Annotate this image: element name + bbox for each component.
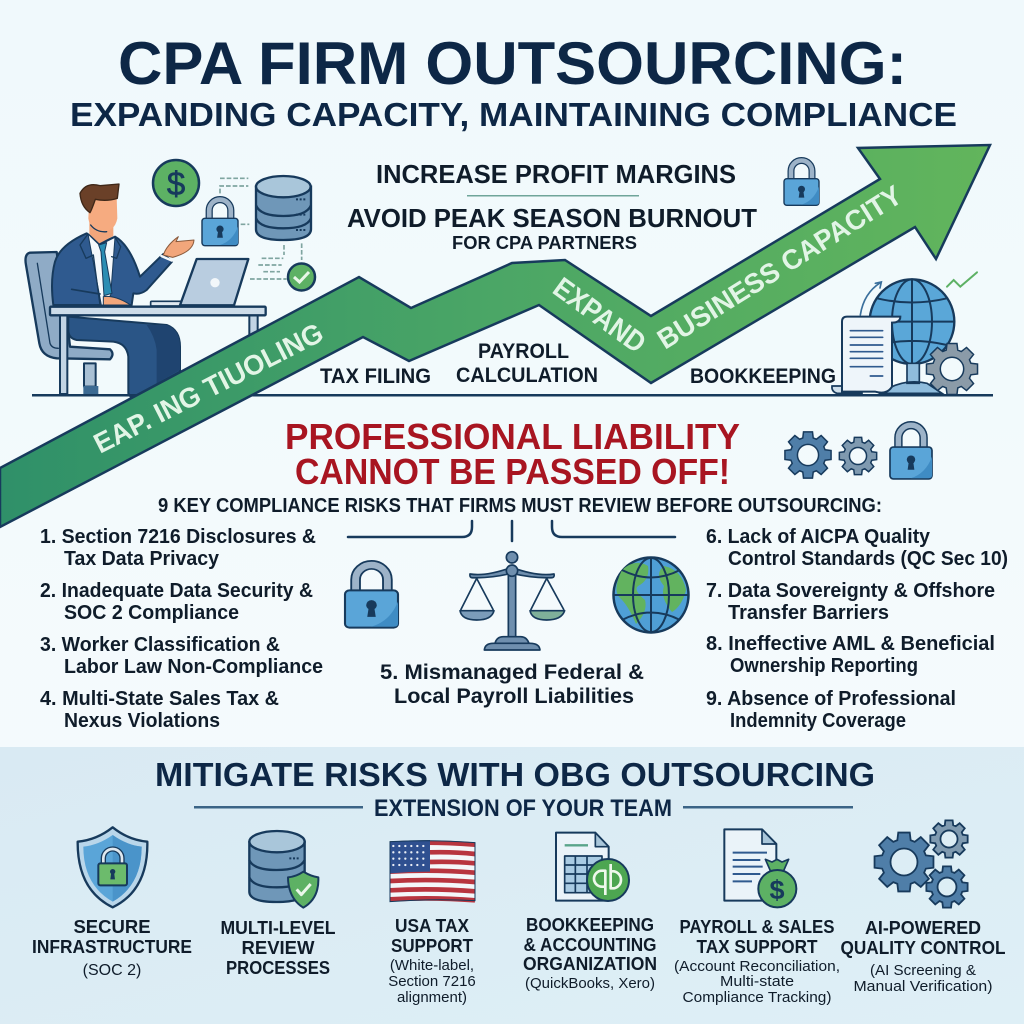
risks list: right column [706, 526, 1008, 732]
risks list: left column: SOC 2 Compliance [64, 602, 239, 624]
label: USA tax support [388, 915, 476, 1006]
icon: security shield [78, 827, 147, 907]
label: multi-level review: PROCESSES [226, 957, 330, 978]
risks list: left column: Tax Data Privacy [64, 548, 220, 570]
label: secure infrastructure: (SOC 2) [83, 962, 141, 979]
service label: payroll calculation: CALCULATION [456, 364, 598, 387]
icon: world globe [614, 558, 688, 632]
risks list: right column: 8. Ineffective AML & Beneficial [706, 633, 995, 655]
label: payroll and sales tax: PAYROLL & SALES [680, 916, 834, 937]
risks list: right column: Ownership Reporting [730, 655, 918, 677]
risks list: right column: 6. Lack of AICPA Quality [706, 526, 931, 548]
label: payroll and sales tax: Multi-state [720, 973, 794, 990]
risks list: left column: 3. Worker Classification & [40, 634, 280, 656]
benefit: avoid peak season burnout: FOR CPA PARTNERS [452, 233, 637, 253]
red heading: professional liability: PROFESSIONAL LIABILITY [285, 416, 740, 457]
risks list: right column: 7. Data Sovereignty & Offshore [706, 580, 995, 602]
red heading: professional liability: CANNOT BE PASSED OFF! [295, 451, 730, 492]
risks list: right column: Transfer Barriers [728, 602, 889, 624]
label: AI-powered quality control: QUALITY CONTROL [840, 937, 1006, 958]
label: USA tax support: (White-label, [390, 957, 474, 974]
icon: dollar coin [153, 160, 199, 206]
label: secure infrastructure [32, 916, 192, 979]
benefit: increase profit margins: INCREASE PROFIT MARGINS [376, 159, 736, 189]
title: CPA FIRM OUTSOURCING: [118, 30, 907, 97]
service label: payroll calculation: PAYROLL [478, 340, 569, 363]
label: bookkeeping and accounting: & ACCOUNTING [524, 934, 656, 955]
bracket connectors [348, 521, 675, 541]
label: AI-powered quality control: AI-POWERED [865, 917, 981, 938]
icon: padlock centre left [345, 565, 398, 628]
icon: blue gears and lock [785, 425, 932, 479]
growth arrow: BUSINESS CAPACITY [652, 179, 908, 355]
label: bookkeeping and accounting: ORGANIZATION [523, 953, 657, 974]
service label: bookkeeping: BOOKKEEPING [690, 365, 836, 388]
label: payroll and sales tax: TAX SUPPORT [696, 936, 818, 957]
icon: grey gear [926, 343, 978, 395]
label: USA tax support: Section 7216 [388, 973, 476, 990]
icon: check badge [288, 264, 315, 290]
label: AI-powered quality control [840, 917, 1006, 995]
icon: USA flag [390, 840, 475, 902]
icon: scales of justice [460, 552, 565, 650]
illustration: accountant at desk [25, 184, 266, 398]
label: USA tax support: SUPPORT [391, 935, 474, 956]
icon: spreadsheet with accounting badge [556, 833, 629, 901]
icon: padlock upper right [784, 160, 819, 205]
label: USA tax support: alignment) [397, 989, 467, 1006]
icon: database server [256, 176, 311, 240]
icon: connector dashes [220, 178, 302, 279]
icon: document with money bag [724, 829, 796, 907]
label: bookkeeping and accounting: BOOKKEEPING [526, 914, 654, 935]
illustration: globe, document and gear [832, 272, 977, 393]
label: payroll and sales tax: Compliance Tracking) [682, 989, 832, 1006]
label: AI-powered quality control: Manual Verification) [854, 978, 993, 995]
label: payroll and sales tax: (Account Reconciliation, [674, 958, 840, 975]
icon: dollar on money bag: $ [769, 875, 785, 905]
risks list: left column: Labor Law Non-Compliance [64, 656, 323, 678]
risk 5 centre: 5. Mismanaged Federal & [380, 660, 644, 684]
risks list: left column: Nexus Violations [64, 710, 220, 732]
service label: tax filing: TAX FILING [320, 365, 431, 388]
panel heading: MITIGATE RISKS WITH OBG OUTSOURCING [155, 756, 875, 793]
risks list: left column: 1. Section 7216 Disclosures & [40, 526, 316, 548]
risk 5 centre [380, 660, 644, 708]
risks list: left column [40, 526, 323, 732]
risks list: right column: Control Standards (QC Sec 10) [728, 548, 1008, 570]
label: multi-level review: MULTI-LEVEL [220, 917, 336, 938]
ground line [32, 394, 993, 396]
benefit: avoid peak season burnout [347, 203, 757, 253]
risks list: right column: Indemnity Coverage [730, 710, 906, 732]
label: secure infrastructure: SECURE [73, 916, 151, 937]
icon: dollar coin: $ [167, 165, 185, 202]
label: multi-level review [220, 917, 336, 978]
risks list: right column: 9. Absence of Professional [706, 688, 956, 710]
growth arrow [0, 145, 990, 527]
label: multi-level review: REVIEW [242, 937, 315, 958]
label: secure infrastructure: INFRASTRUCTURE [32, 936, 192, 957]
risk 5 centre: Local Payroll Liabilities [394, 684, 634, 708]
icon: padlock near database [202, 200, 238, 246]
panel subheading: EXTENSION OF YOUR TEAM [374, 795, 672, 822]
title: EXPANDING CAPACITY, MAINTAINING COMPLIANCE [70, 96, 957, 133]
growth arrow: EAP. ING TIUOLING [89, 317, 328, 459]
label: bookkeeping and accounting: (QuickBooks, Xero) [525, 975, 655, 992]
label: payroll and sales tax [674, 916, 840, 1006]
service label: payroll calculation [456, 340, 598, 387]
red heading: professional liability [285, 416, 740, 492]
risks list: left column: 2. Inadequate Data Security & [40, 580, 313, 602]
label: USA tax support: USA TAX [395, 915, 470, 936]
label: bookkeeping and accounting [523, 914, 657, 992]
benefit: avoid peak season burnout: AVOID PEAK SEASON BURNOUT [347, 203, 757, 233]
icon: database with shield [249, 831, 318, 908]
growth arrow: EXPAND [547, 272, 651, 360]
label: AI-powered quality control: (AI Screening & [870, 962, 976, 979]
panel: mitigate risks [0, 747, 1024, 1024]
icon: AI quality gears [875, 820, 968, 908]
title [70, 30, 957, 133]
risks list: left column: 4. Multi-State Sales Tax & [40, 688, 279, 710]
subheading: 9 key compliance risks: 9 KEY COMPLIANCE RISKS THAT FIRMS MUST REVIEW BEFORE OUTSOURCING: [158, 495, 882, 517]
